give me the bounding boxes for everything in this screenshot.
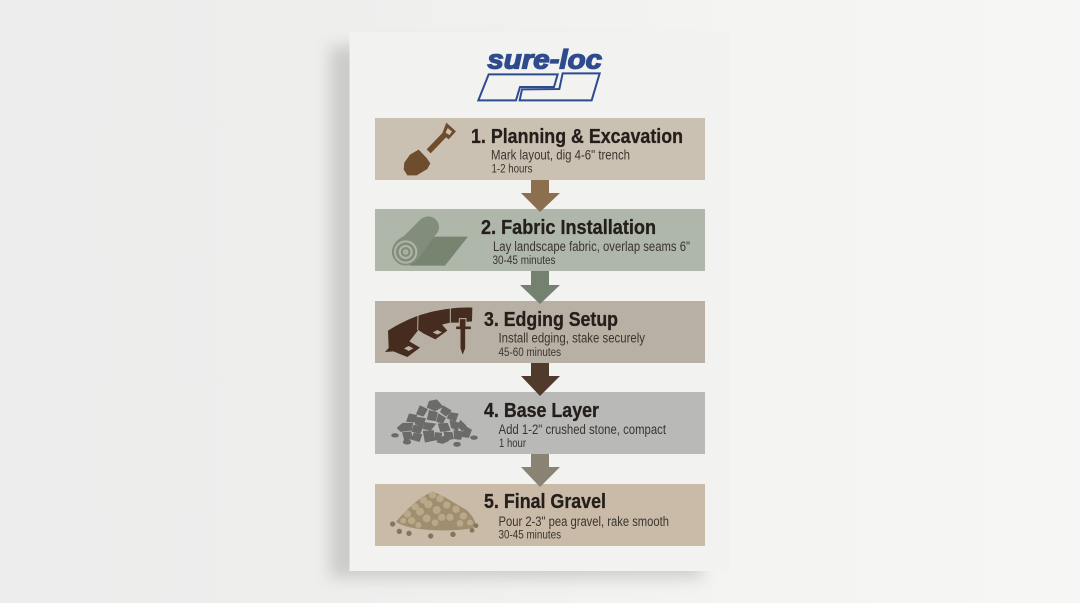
step 3 banner <box>375 301 705 363</box>
icon: pea gravel pile <box>390 491 478 539</box>
step 1 description: Mark layout, dig 4-6" trench <box>491 148 630 162</box>
step 4 time: 1 hour <box>499 438 526 450</box>
step 3 title: 3. Edging Setup <box>484 308 618 331</box>
icon: fabric roll <box>392 217 468 266</box>
step 4 banner <box>375 392 705 454</box>
step 5 title: 5. Final Gravel <box>484 490 606 513</box>
step 5 description: Pour 2-3" pea gravel, rake smooth <box>498 514 669 529</box>
step 4 title: 4. Base Layer <box>484 399 599 422</box>
step 4 description: Add 1-2" crushed stone, compact <box>498 422 666 437</box>
poster panel <box>350 32 730 571</box>
step 3 time: 45-60 minutes <box>498 347 561 359</box>
logo mark <box>478 73 600 100</box>
step 2 description: Lay landscape fabric, overlap seams 6" <box>493 239 690 254</box>
step 2 title: 2. Fabric Installation <box>481 216 656 239</box>
step 5 banner <box>375 484 705 546</box>
arrow 2 <box>520 271 560 304</box>
step 2 time: 30-45 minutes <box>492 255 556 267</box>
step 1 time: 1-2 hours <box>492 164 533 176</box>
step 1 banner <box>375 118 705 180</box>
arrow 3 <box>521 363 560 396</box>
step 3 description: Install edging, stake securely <box>498 330 645 346</box>
arrow 4 <box>521 454 560 487</box>
icon: edging and stake <box>385 308 472 357</box>
step 5 time: 30-45 minutes <box>498 530 561 542</box>
icon: shovel <box>404 123 456 175</box>
icon: crushed stone pile <box>392 400 477 446</box>
logo: sure-loc <box>478 44 602 100</box>
step 2 banner <box>375 209 705 271</box>
step 1 title: 1. Planning & Excavation <box>471 125 683 148</box>
logo wordmark: sure-loc <box>487 44 602 74</box>
arrow 1 <box>521 180 560 212</box>
